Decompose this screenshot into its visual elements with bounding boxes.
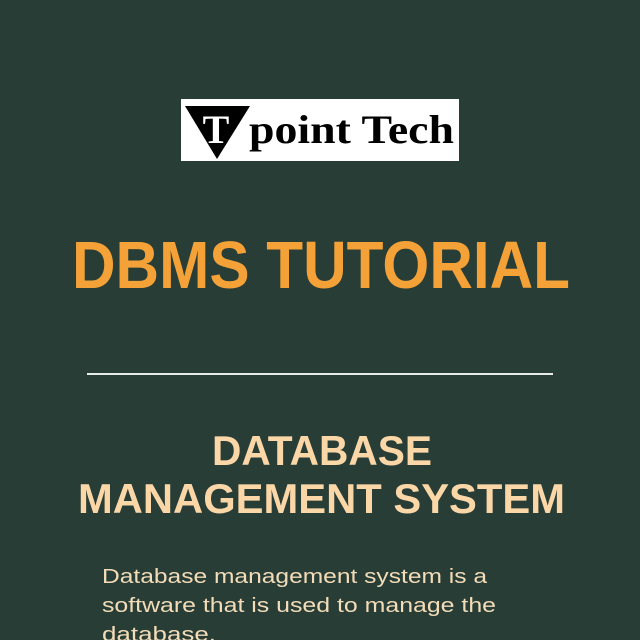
divider line — [87, 373, 553, 375]
subtitle: MANAGEMENT SYSTEM — [78, 475, 565, 522]
title: DBMS TUTORIAL — [72, 228, 570, 303]
icon: triangle — [185, 106, 250, 159]
logo text: point Tech — [249, 107, 454, 152]
icon: triangle: T — [203, 107, 230, 152]
body text — [102, 566, 496, 640]
logo — [181, 99, 459, 161]
subtitle: DATABASE — [212, 427, 432, 474]
subtitle — [78, 427, 565, 522]
body text: Database management system is a — [102, 566, 488, 588]
body text: software that is used to manage the — [102, 595, 496, 617]
